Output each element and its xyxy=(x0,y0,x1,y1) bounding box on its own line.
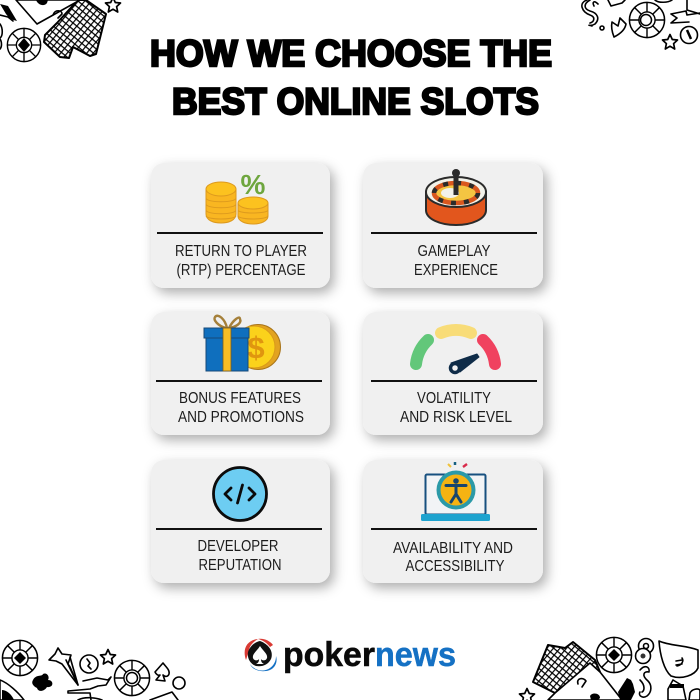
label: VOLATILITY xyxy=(417,390,491,407)
label xyxy=(198,538,282,574)
icon: code circle xyxy=(214,468,266,520)
panel: volatility xyxy=(363,312,543,435)
label: ACCESSIBILITY xyxy=(406,558,504,575)
divider line xyxy=(157,232,323,234)
label xyxy=(400,390,512,426)
divider line xyxy=(156,528,322,530)
logo: pokernews: poker xyxy=(283,636,375,674)
icon: spade emblem xyxy=(245,639,277,671)
label xyxy=(175,243,307,279)
title: HOW WE CHOOSE THE xyxy=(150,33,552,74)
label xyxy=(393,540,513,575)
panel: return to player xyxy=(151,163,330,288)
label: EXPERIENCE xyxy=(414,262,498,279)
icon: accessibility laptop xyxy=(421,462,490,521)
decoration: top right casino doodles xyxy=(582,0,700,49)
label: AND PROMOTIONS xyxy=(178,409,304,426)
logo: pokernews: news xyxy=(375,636,456,674)
label: AVAILABILITY AND xyxy=(393,540,513,557)
icon: risk gauge xyxy=(416,330,495,372)
decoration: bottom left casino doodles xyxy=(0,640,185,700)
panel: availability xyxy=(363,460,543,583)
label xyxy=(414,243,498,279)
panel: gameplay experience xyxy=(363,163,543,288)
label: GAMEPLAY xyxy=(418,243,490,260)
label: RETURN TO PLAYER xyxy=(175,243,307,260)
decoration: bottom right casino doodles xyxy=(520,637,700,700)
divider line xyxy=(371,528,537,530)
label xyxy=(178,390,304,426)
panel: bonus features xyxy=(151,312,330,435)
divider line xyxy=(156,380,322,382)
label: AND RISK LEVEL xyxy=(400,409,512,426)
label: REPUTATION xyxy=(198,557,282,574)
icon: coin stacks and percent xyxy=(206,169,268,224)
label: (RTP) PERCENTAGE xyxy=(176,262,306,279)
icon: gift box and coin xyxy=(204,316,280,371)
label: DEVELOPER xyxy=(198,538,278,555)
panel: developer reputation xyxy=(151,460,330,583)
divider line xyxy=(371,232,537,234)
icon: coin stacks and percent: % xyxy=(241,169,266,200)
logo: pokernews xyxy=(245,636,456,674)
divider line xyxy=(371,380,537,382)
icon: gift box and coin: $ xyxy=(247,330,265,365)
title xyxy=(150,33,552,122)
title: BEST ONLINE SLOTS xyxy=(172,81,539,122)
label: BONUS FEATURES xyxy=(179,390,301,407)
decoration: top left casino doodles xyxy=(0,0,120,62)
icon: roulette wheel xyxy=(426,169,486,225)
